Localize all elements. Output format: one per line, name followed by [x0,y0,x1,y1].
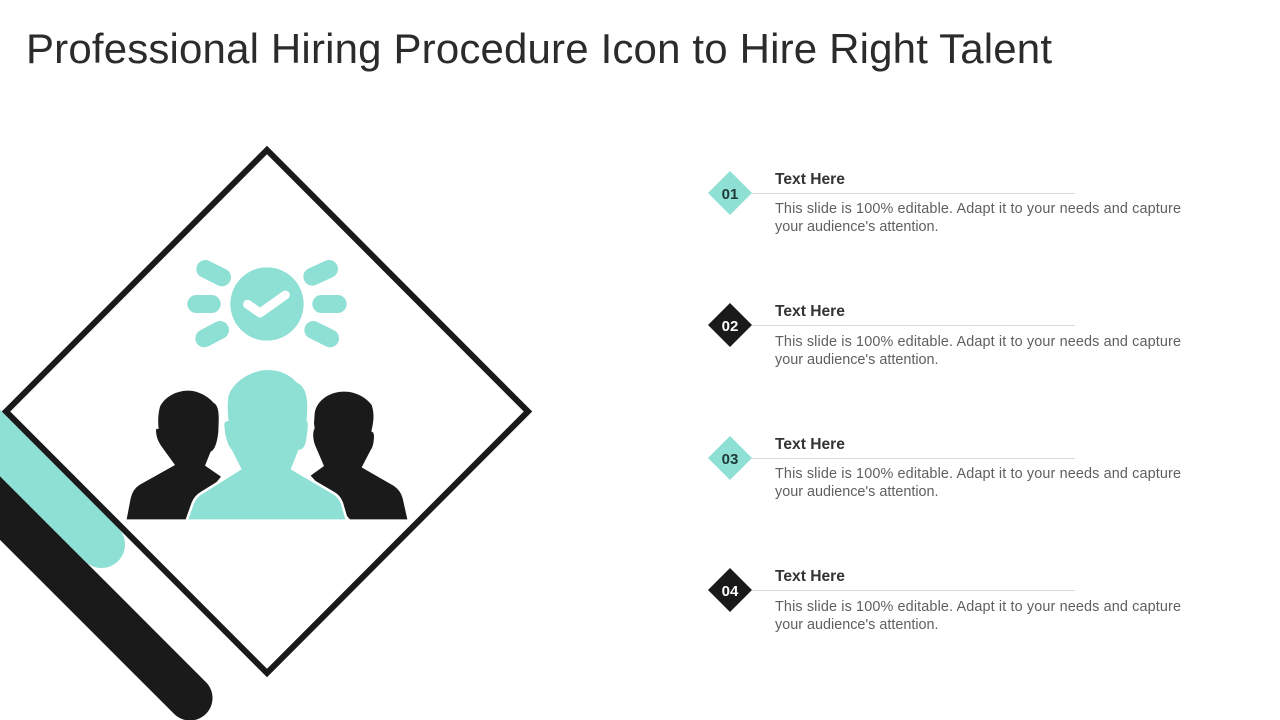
number badge 04 [708,568,752,612]
diamond frame [6,150,528,673]
list item 02 [708,303,1181,368]
body text 04: your audience's attention. [775,617,939,633]
number badge 04: 04 [722,583,739,600]
body text 03: This slide is 100% editable. Adapt it to your needs and capture [775,466,1181,482]
heading 03: Text Here [775,436,845,453]
icon: approval badge [196,267,338,341]
list item 03 [708,436,1181,500]
list item 04 [708,568,1181,633]
number badge 02: 02 [722,318,738,335]
heading 02: Text Here [775,303,845,320]
body text 04: This slide is 100% editable. Adapt it to your needs and capture [775,599,1181,615]
icon: left person silhouette [127,391,221,519]
title: Professional Hiring Procedure Icon to Hire Right Talent [26,25,1052,72]
body text 02: your audience's attention. [775,352,939,368]
body text 01: your audience's attention. [775,219,939,235]
body text 02: This slide is 100% editable. Adapt it to your needs and capture [775,334,1181,350]
number badge 01 [708,171,752,215]
decorative black diagonal bar [0,458,190,698]
badge circle [230,267,304,341]
number badge 03 [708,436,752,480]
badge rays [196,269,338,338]
list item 01 [708,171,1181,235]
heading 01: Text Here [775,171,845,188]
number badge 01: 01 [722,186,738,203]
number badge 03: 03 [722,451,738,468]
number badge 02 [708,303,752,347]
icon: right person silhouette [311,392,407,519]
body text 03: your audience's attention. [775,484,939,500]
icon: center person silhouette [188,370,345,519]
icon: hiring group with approval badge [127,267,407,519]
check mark [248,295,285,313]
body text 01: This slide is 100% editable. Adapt it to your needs and capture [775,201,1181,217]
decorative teal diagonal bar [0,393,102,544]
heading 04: Text Here [775,568,845,585]
